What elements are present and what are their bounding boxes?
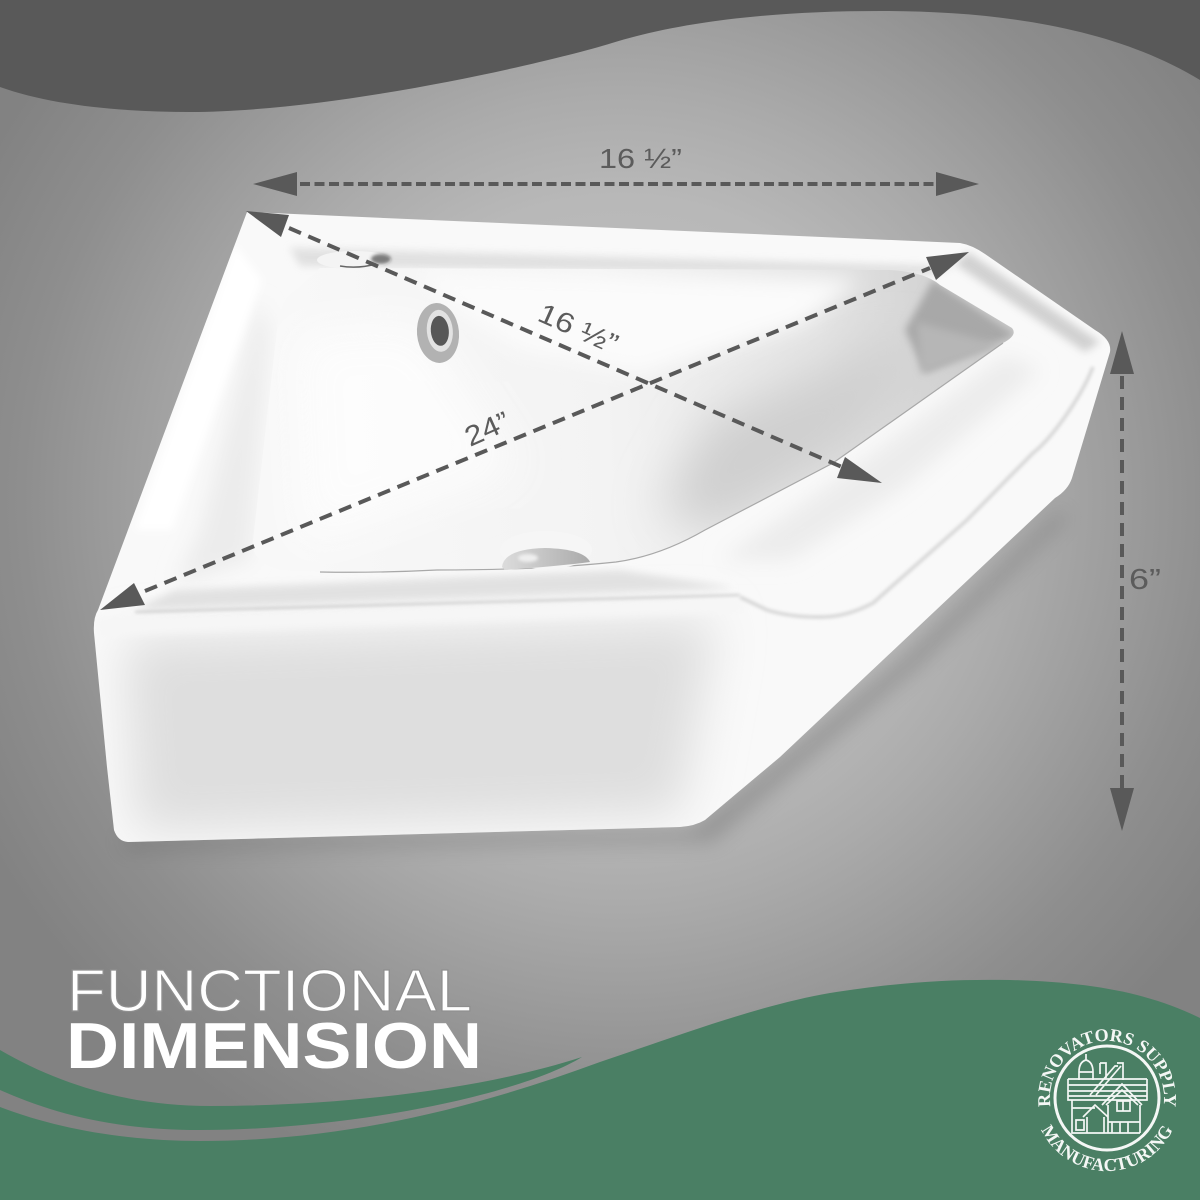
overflow ring highlight (425, 309, 455, 353)
faucet hole recess (317, 251, 391, 269)
front face shade (125, 620, 715, 832)
title (66, 958, 482, 1082)
front rim lighter strip (95, 597, 745, 636)
arrow: diagonal 24 (100, 252, 969, 610)
top rim inner shade (290, 248, 955, 276)
right deck shade (749, 363, 1024, 556)
overflow ring (414, 301, 462, 365)
label: diagonal 24: 24” (460, 405, 514, 452)
logo house (1068, 1054, 1147, 1133)
dimension arrows (100, 172, 1134, 831)
overflow hole (430, 315, 450, 347)
left deck shade (190, 332, 264, 572)
far corner shadow (905, 280, 1015, 372)
basin interior (415, 268, 1014, 558)
house dome (1079, 1054, 1093, 1080)
basin edge line (320, 343, 1003, 572)
faucet hole lower line (340, 264, 376, 267)
sink body (94, 212, 1110, 842)
drain highlight (518, 554, 538, 562)
drain (500, 531, 592, 570)
reflection in corner (918, 325, 982, 372)
faucet hole shadow (371, 254, 391, 264)
logo: Renovators Supply Manufacturing (1038, 1029, 1176, 1172)
sink shading (95, 245, 1100, 832)
right rim edge shade (955, 252, 1100, 352)
green base (0, 980, 1200, 1200)
sink photo illustration (94, 212, 1110, 842)
house chimneys (1100, 1063, 1123, 1080)
title line 2: DIMENSION (66, 1009, 482, 1082)
left interior highlight (290, 320, 520, 550)
left rim highlight (214, 250, 233, 298)
green swoosh (0, 1050, 582, 1130)
faucet hole (317, 251, 391, 269)
logo ring (1055, 1046, 1159, 1150)
label: diagonal 16 1/2: 16 ½” (534, 297, 623, 360)
arrow: diagonal 16 1/2 (246, 211, 882, 483)
arrow: top width (253, 172, 979, 196)
deck shade above front (135, 570, 735, 610)
basin centre shadow (660, 357, 884, 534)
label: height: 6” (1129, 564, 1161, 596)
house windows (1117, 1101, 1130, 1111)
sink shadow (118, 510, 1066, 850)
drain cap (502, 548, 590, 570)
house gable (1102, 1084, 1142, 1133)
basin fill (634, 270, 1014, 556)
arrow: height (1110, 331, 1134, 831)
right raised ridge (740, 367, 1093, 617)
top dark wave band (0, 0, 1200, 112)
logo top arc text: RENOVATORS SUPPLY (1038, 1029, 1176, 1107)
house porch (1072, 1100, 1140, 1133)
rim crease front (135, 595, 740, 612)
drain collar (500, 531, 592, 569)
upper interior highlight (600, 275, 850, 366)
house roof (1068, 1066, 1147, 1100)
dimension labels (460, 143, 1161, 596)
logo bottom arc text: MANUFACTURING (1040, 1124, 1172, 1172)
label: top width: 16 ½” (599, 143, 682, 174)
overflow fitting (414, 301, 462, 365)
bottom green wave band (0, 980, 1200, 1200)
title line 1: FUNCTIONAL (67, 958, 472, 1024)
